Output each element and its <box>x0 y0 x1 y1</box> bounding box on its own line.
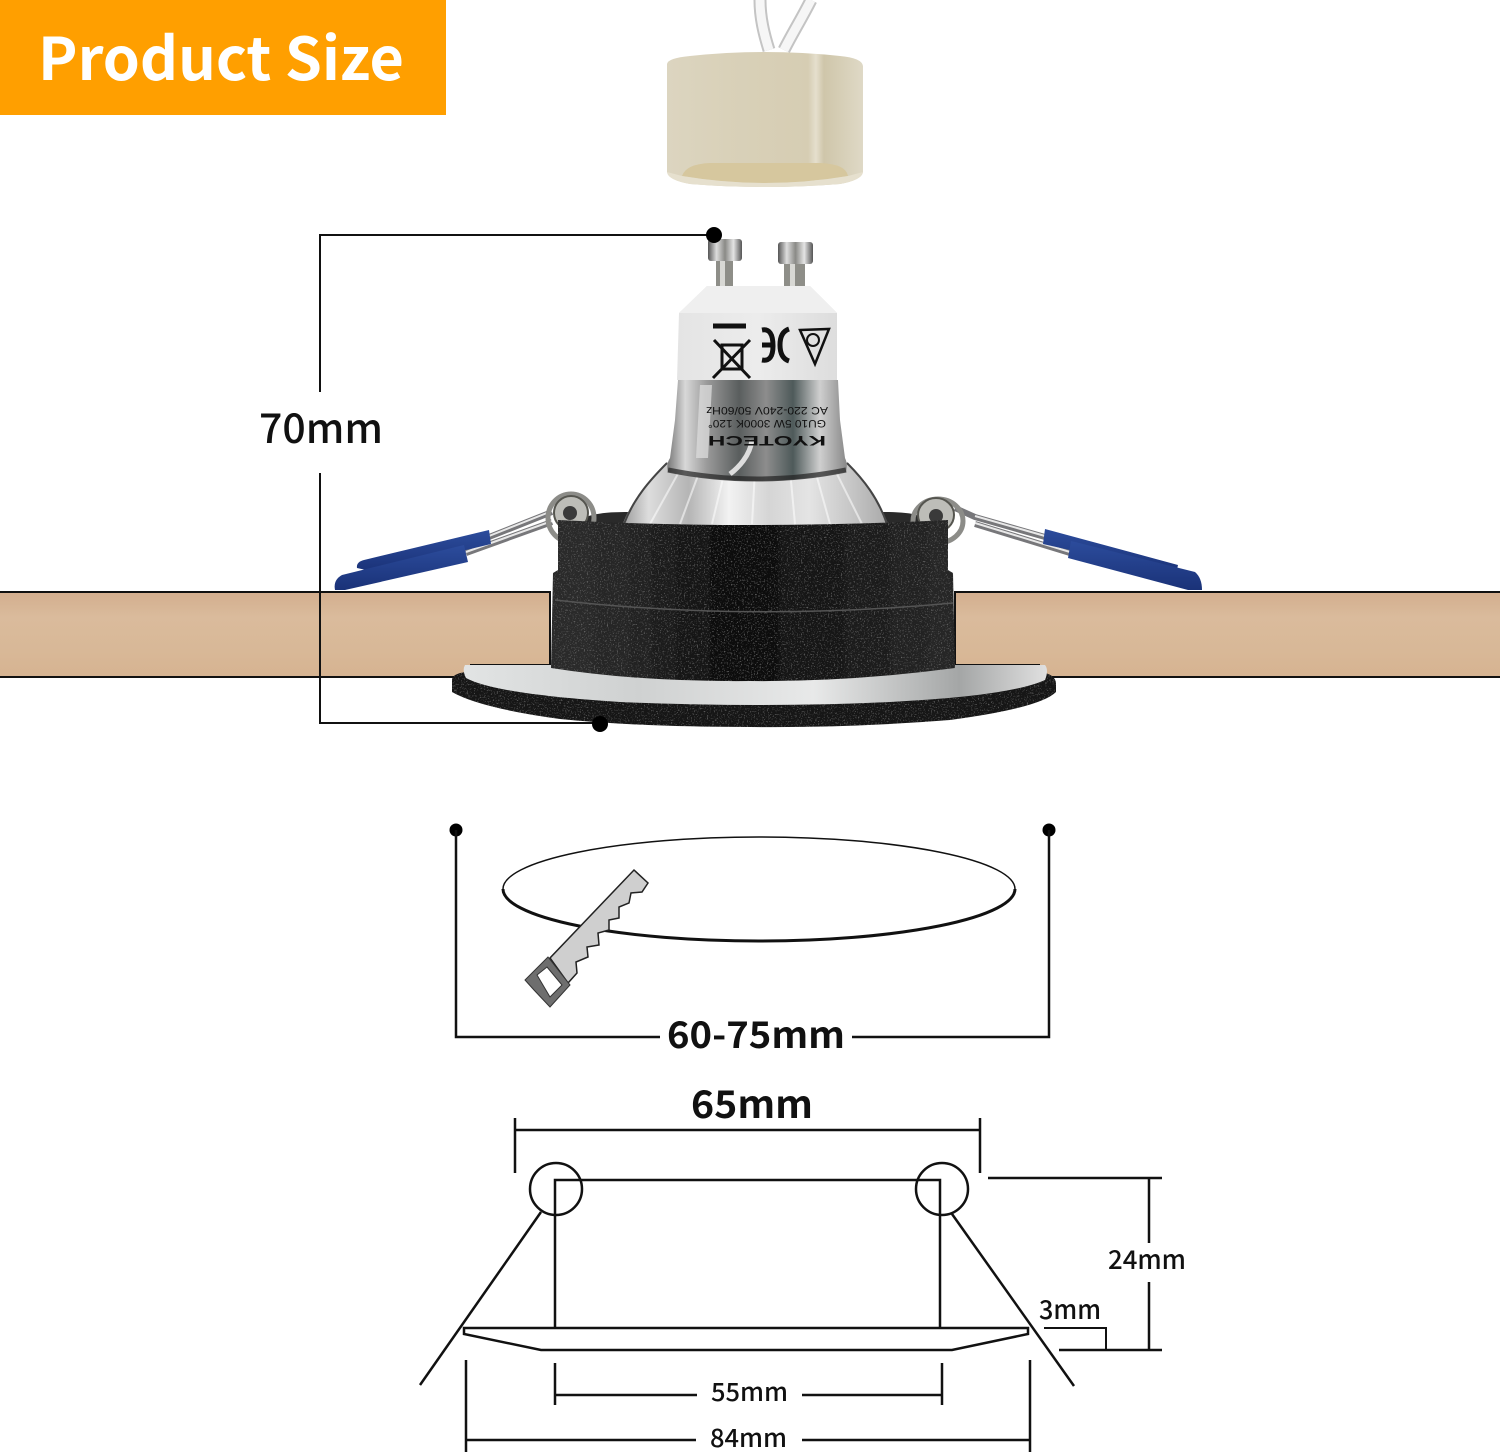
ceramic base <box>677 286 837 380</box>
housing body <box>551 520 955 681</box>
bulb printed text: AC 220-240V 50/60Hz <box>706 404 828 416</box>
flange silver ring <box>464 665 1047 705</box>
GU10 bulb <box>622 239 889 526</box>
GU10 ceramic socket with wires <box>667 0 863 187</box>
title banner <box>0 0 446 115</box>
drawing outline <box>420 1163 1074 1386</box>
black housing with flange <box>452 520 1056 727</box>
84mm dimension: 84mm <box>710 1419 787 1455</box>
84mm dimension <box>466 1360 1030 1455</box>
ceiling board <box>0 592 1500 677</box>
55mm dimension <box>555 1363 942 1409</box>
housing rear rim <box>575 512 935 524</box>
60-75mm cut-out dimension <box>450 824 1056 1059</box>
65mm dimension <box>515 1074 980 1173</box>
glass neck <box>667 380 847 481</box>
title banner: Product Size <box>38 12 404 97</box>
reflector cup <box>622 462 889 526</box>
spring clip right <box>913 498 1202 590</box>
technical drawing <box>420 1074 1186 1455</box>
spring clip left <box>335 494 594 590</box>
cut-out hole ellipse <box>503 837 1015 941</box>
bulb printed text: KYOTECH <box>708 433 826 449</box>
24mm dimension <box>988 1178 1186 1350</box>
70mm height dimension <box>259 227 722 732</box>
3mm dimension <box>1039 1290 1106 1350</box>
certification marks <box>713 326 829 378</box>
bulb printed text <box>706 404 828 449</box>
55mm dimension: 55mm <box>711 1373 788 1409</box>
65mm dimension: 65mm <box>691 1074 813 1129</box>
bulb pins <box>708 239 813 288</box>
flange black rim <box>452 672 1056 727</box>
60-75mm cut-out dimension: 60-75mm <box>667 1005 845 1059</box>
3mm dimension: 3mm <box>1039 1290 1101 1327</box>
bulb printed text: GU10 5W 3000K 120° <box>708 417 826 429</box>
70mm height dimension: 70mm <box>259 395 383 455</box>
icon: hand saw <box>525 870 648 1007</box>
24mm dimension: 24mm <box>1108 1240 1186 1277</box>
